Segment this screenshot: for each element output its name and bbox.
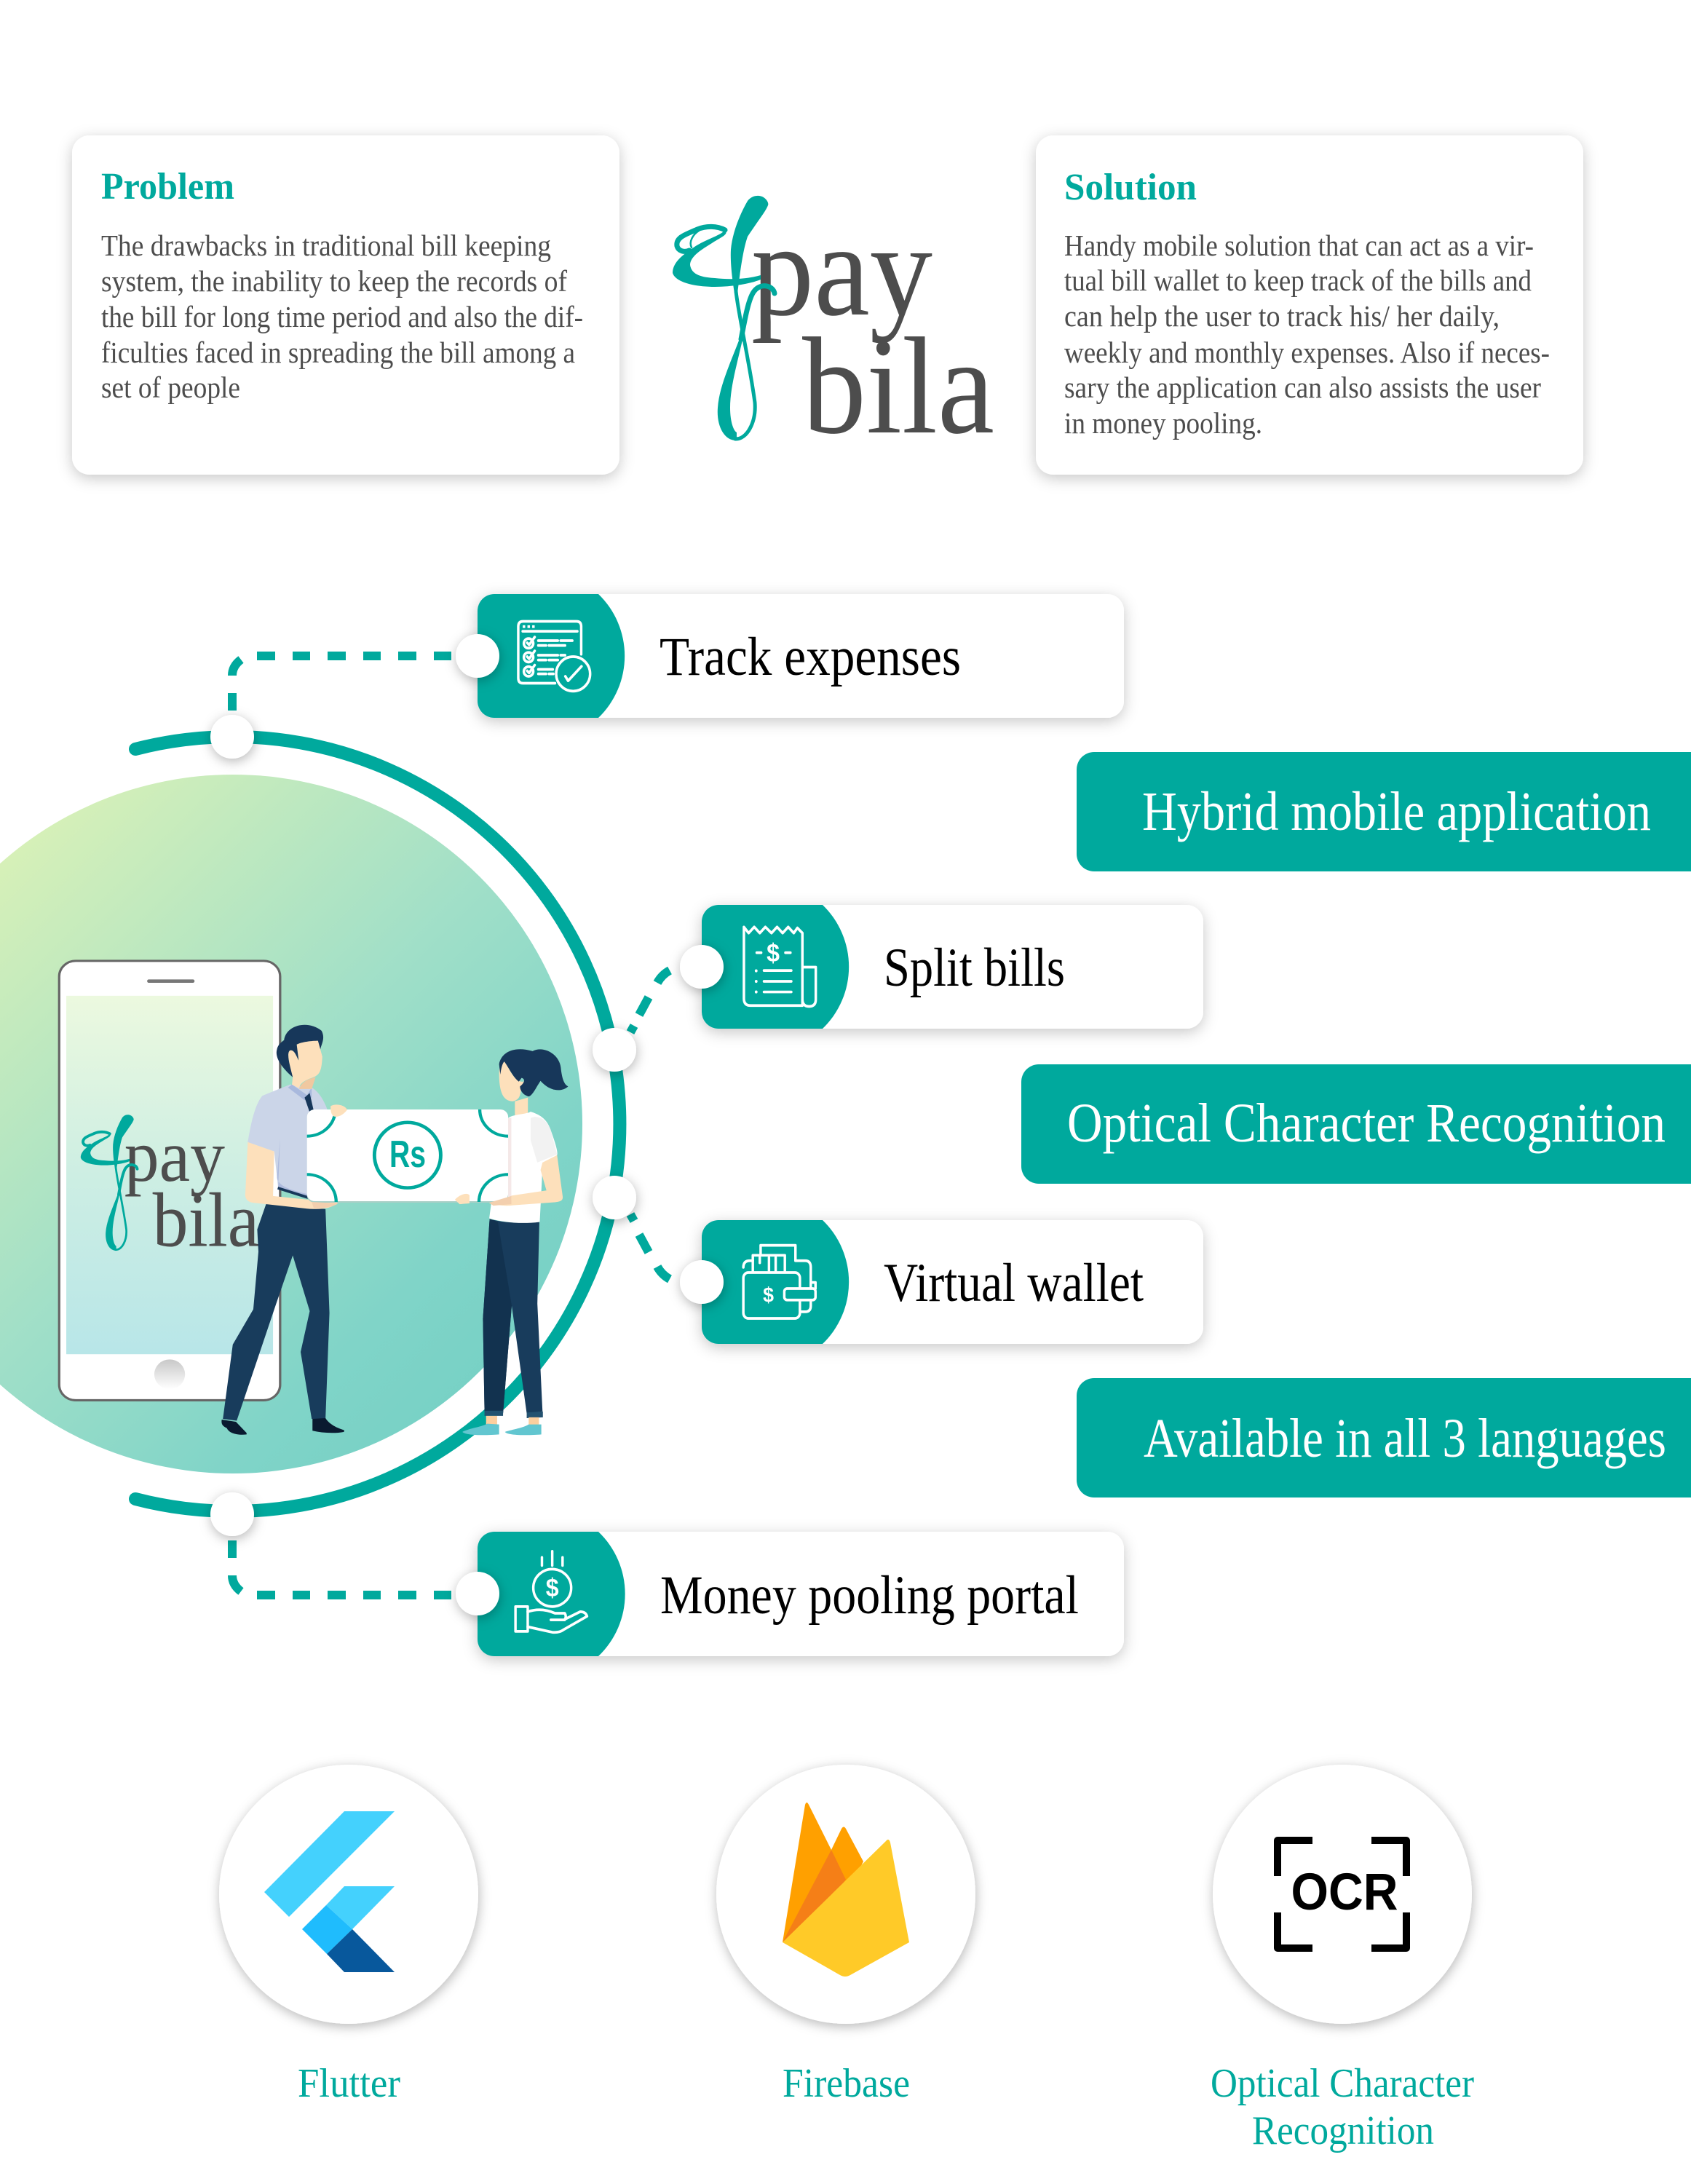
label: firebase: Firebase [783,2061,910,2106]
label: track expenses: Track expenses [660,627,961,687]
label: Rs: Rs [389,1133,426,1176]
feature card: track expenses [456,594,1124,718]
connector: virtual wallet [630,1214,670,1279]
tech: firebase [716,1765,975,2106]
text block: problem description: The drawbacks in traditional bill keeping [101,229,551,262]
connector: money pooling [232,1540,451,1595]
phone [59,961,280,1400]
connector: split bills [630,970,670,1032]
heading: problem: Problem [101,166,234,207]
tech: flutter [219,1765,478,2106]
feature banner: hybrid mobile application [1077,752,1691,871]
ring nodes [210,715,636,1536]
tech: optical character recognition [1211,1765,1474,2153]
text block: solution description: weekly and monthly expenses. Also if neces- [1064,336,1550,369]
illustration: phone and two people exchanging a bill [59,961,568,1435]
bank note [307,1104,511,1208]
feature banner: optical character recognition [1021,1064,1691,1184]
text block: solution description: sary the application can also assists the user [1064,371,1541,404]
heading: solution: Solution [1064,167,1197,208]
panel: problem [72,135,619,475]
panel: solution [1036,135,1583,475]
text block: solution description: Handy mobile solution that can act as a vir- [1064,229,1534,262]
icon: receipt [744,927,816,1006]
logo: pay bila: bila [802,310,994,463]
icon: flutter logo [264,1811,395,1972]
phone logo [81,1115,259,1263]
label: optical character recognition: Recognition [1252,2108,1434,2153]
icon: checklist [518,621,590,691]
icon: wallet [743,1246,815,1318]
text block: problem description: set of people [101,371,240,404]
text block: problem description: ficulties faced in spreading the bill among a [101,336,575,369]
phone logo: bila [153,1178,259,1263]
icon: OCR brackets: OCR [1291,1864,1398,1921]
icon: receipt: $ [767,940,780,968]
text block: problem description: system, the inability to keep the records of [101,264,567,298]
label: flutter: Flutter [298,2061,400,2106]
logo: pay bila: pay [751,196,932,344]
label: money pooling portal: Money pooling portal [660,1565,1079,1626]
feature card: money pooling portal [456,1532,1124,1656]
phone logo: pay [124,1115,225,1197]
feature banner: available in all 3 languages [1077,1378,1691,1497]
text block: solution description: in money pooling. [1064,406,1262,440]
icon: OCR brackets [1278,1840,1406,1948]
text block: solution description: tual bill wallet to keep track of the bills and [1064,264,1532,297]
feature card: virtual wallet [680,1220,1203,1344]
text block: solution description [1064,229,1550,440]
text block: problem description: the bill for long time period and also the dif- [101,300,583,333]
icon: coin over hand [515,1551,587,1632]
label: optical character recognition: Optical Character [1211,2061,1474,2106]
logo: pay bila [673,196,994,463]
label: optical character recognition [1211,2061,1474,2153]
label: virtual wallet: Virtual wallet [884,1253,1144,1313]
icon: firebase logo [783,1803,909,1977]
icon: wallet: $ [763,1283,775,1307]
man [221,1025,344,1435]
feature card: split bills [680,905,1203,1029]
circle gradient background [0,775,582,1473]
connector: track expenses [232,656,451,711]
label: split bills: Split bills [884,938,1065,998]
text block: problem description [101,229,583,404]
icon: coin over hand: $ [546,1575,559,1602]
woman [462,1049,568,1435]
ring arc [135,737,619,1511]
text block: solution description: can help the user to track his/ her daily, [1064,299,1500,333]
